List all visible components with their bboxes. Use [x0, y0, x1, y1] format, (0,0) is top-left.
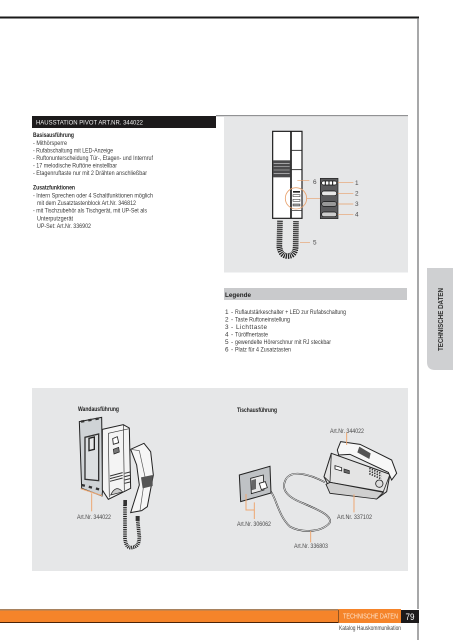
label: Art.Nr. 336803: Art.Nr. 336803 [294, 543, 328, 550]
callout numbers: 5 [313, 240, 317, 247]
text block: legend list: - [231, 324, 233, 331]
text block: legend list: 3 [225, 324, 229, 331]
text block: Basisausführung [33, 132, 153, 177]
label: Art.Nr. 337102: Art.Nr. 337102 [337, 514, 372, 521]
footer band [0, 609, 419, 623]
heading: Tischausführung: Tischausführung [237, 407, 277, 414]
callout numbers: 2 [355, 191, 359, 198]
callout numbers: 3 [355, 201, 359, 208]
text block: Basisausführung: - Mithörsperre [33, 140, 67, 147]
text block: Zusatzfunktionen [33, 185, 153, 230]
heading: Hausstation Pivot [32, 116, 216, 128]
text block: legend list [225, 309, 346, 354]
icon: button detail [320, 178, 338, 219]
text block: legend list: Platz für 4 Zusatztasten [235, 346, 291, 354]
callout numbers: 1 [355, 180, 359, 187]
icon: intercom body [273, 131, 302, 218]
text block: legend list: 5 [225, 339, 229, 346]
text block: legend list: 4 [225, 332, 229, 338]
panel: mounting versions [32, 388, 408, 571]
text block: Zusatzfunktionen: Zusatzfunktionen [33, 185, 75, 192]
text block: legend list: - [231, 332, 233, 338]
text block: Basisausführung: Basisausführung [33, 132, 74, 139]
side tab: Technische Daten [427, 268, 453, 370]
callout numbers: 6 [313, 179, 317, 186]
illustration: table version [239, 432, 397, 542]
panel: device front view [224, 117, 408, 272]
text block: Basisausführung: - 17 melodische Ruftöne einstellbar [33, 163, 118, 170]
label: Art.Nr. 344022 wall: Art.Nr. 344022 [77, 514, 111, 521]
footer caption: Katalog Hauskommunikation [339, 626, 401, 632]
text block: Basisausführung: - Ruftonunterscheidung Tür-, Etagen- und Internruf [33, 155, 153, 162]
text block: legend list: Ruflautstärkeschalter + LED zur Rufabschaltung [235, 309, 346, 316]
text block: legend list: 1 [225, 309, 229, 316]
text block: legend list: - [231, 309, 233, 316]
heading: Legende: Legende [225, 292, 251, 299]
footer band: TECHNISCHE DATEN [343, 612, 398, 621]
text block: Basisausführung: - Etagenruftaste nur mit 2 Drähten anschließbar [33, 170, 148, 177]
text block: legend list: gewendelte Hörerschnur mit RJ steckbar [235, 339, 332, 346]
text block: legend list: Lichttaste [236, 324, 267, 331]
heading: Legende [224, 288, 407, 300]
text block: legend list: 6 [225, 346, 229, 354]
callout numbers: 4 [355, 212, 359, 219]
footer band: 79 [406, 612, 414, 623]
side tab: Technische Daten: TECHNISCHE DATEN [436, 288, 445, 351]
label: Art.Nr. 344022 table: Art.Nr. 344022 [330, 428, 364, 435]
text block: Basisausführung: - Rufabschaltung mit LED-Anzeige [33, 147, 113, 154]
illustration: wall version [79, 417, 153, 548]
text block: Zusatzfunktionen: - Intern Sprechen oder 4 Schaltfunktionen möglich [33, 193, 153, 200]
text block: Zusatzfunktionen: UP-Set: Art.Nr. 336902 [37, 223, 91, 230]
text block: Zusatzfunktionen: Unterputzgerät [37, 215, 73, 222]
text block: legend list: Taste Ruftoneinstellung [235, 316, 290, 324]
heading: Hausstation Pivot: HAUSSTATION PIVOT ART.NR. 344022 [36, 119, 143, 126]
text block: legend list: - [231, 346, 233, 354]
text block: legend list: - [231, 339, 233, 346]
callout numbers [313, 179, 359, 247]
label: Art.Nr. 306062: Art.Nr. 306062 [237, 521, 271, 528]
text block: legend list: - [231, 316, 233, 324]
text block: legend list: 2 [225, 316, 229, 324]
icon: handset cord [279, 221, 296, 256]
text block: legend list: Türöffnertaste [235, 332, 268, 338]
text block: Zusatzfunktionen: - mit Tischzubehör als Tischgerät, mit UP-Set als [33, 208, 147, 215]
text block: Zusatzfunktionen: mit dem Zusatztastenblock Art.Nr. 346812 [37, 200, 136, 207]
heading: Wandausführung: Wandausführung [78, 406, 119, 413]
